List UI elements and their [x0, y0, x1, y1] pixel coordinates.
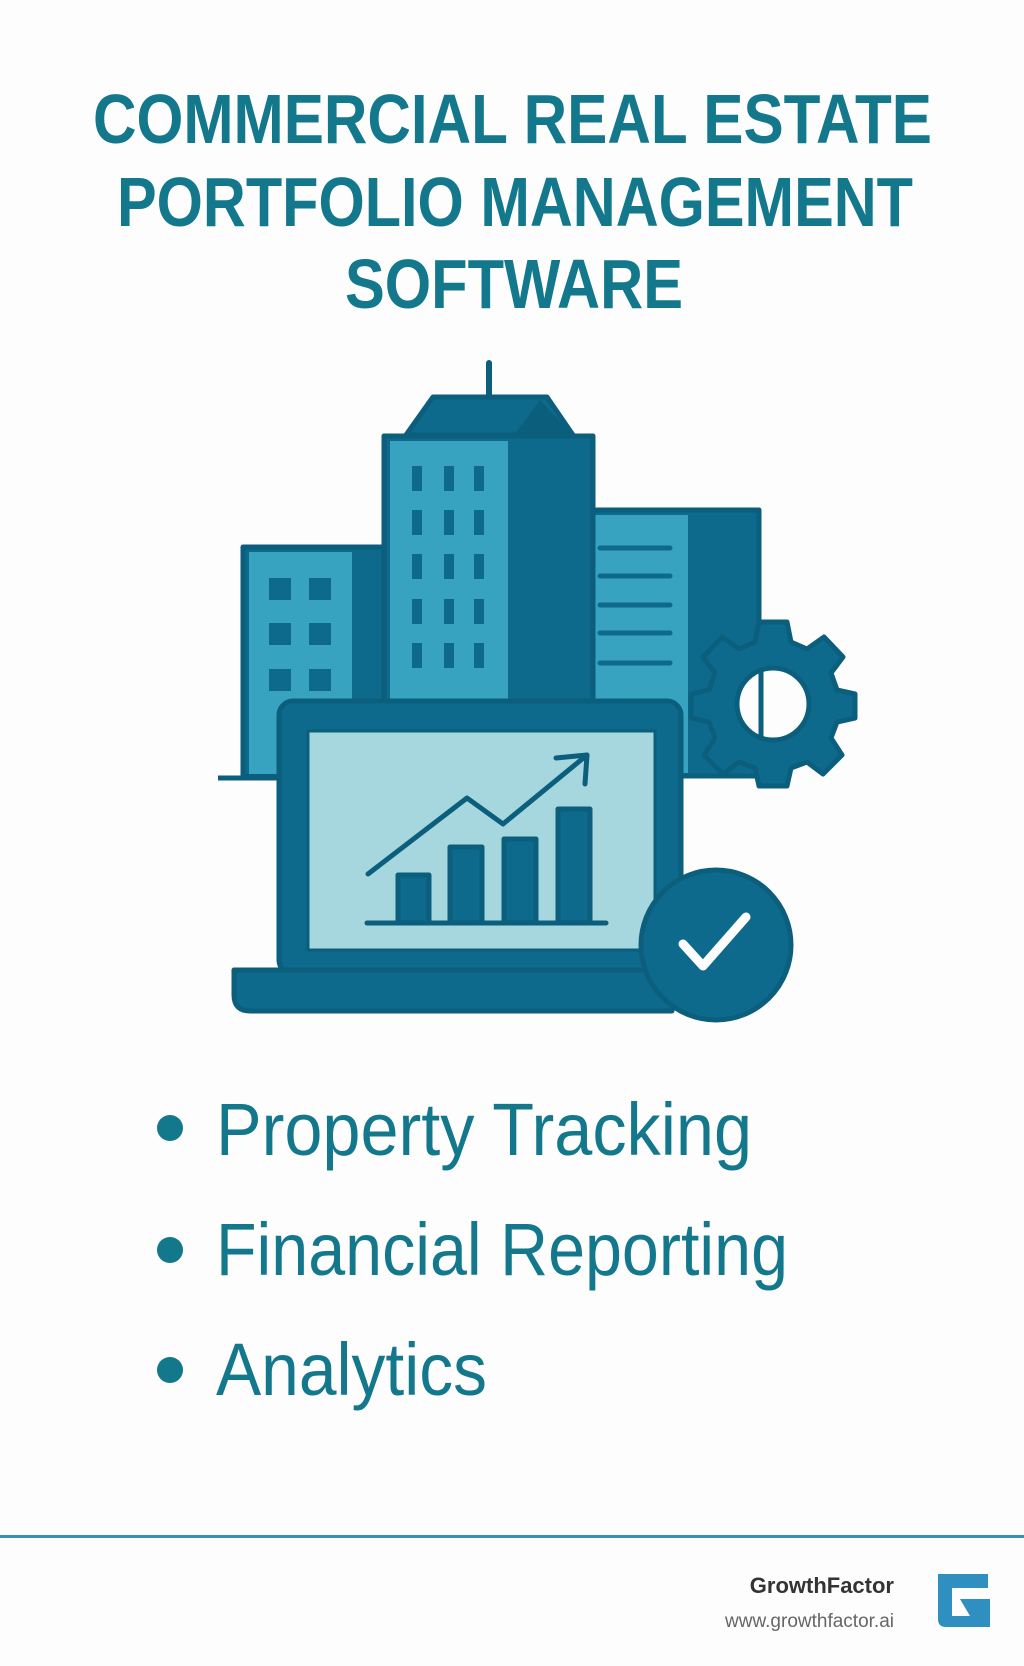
footer brand text — [724, 1573, 894, 1632]
icon: check badge — [641, 870, 791, 1020]
title: SOFTWARE — [345, 245, 683, 323]
bullet list — [157, 1088, 788, 1411]
bullet: financial reporting: Financial Reporting — [216, 1208, 788, 1291]
logo — [938, 1574, 990, 1627]
footer brand text: GrowthFactor — [750, 1573, 894, 1598]
bullet: property tracking: Property Tracking — [216, 1088, 752, 1171]
title — [93, 80, 932, 323]
illustration: buildings with laptop — [218, 363, 855, 1020]
icon: tall building — [384, 363, 593, 702]
bullet: analytics: Analytics — [216, 1328, 487, 1411]
icon: gear — [691, 622, 855, 786]
bar chart — [367, 755, 606, 923]
icon: left building — [218, 547, 384, 778]
icon: laptop — [234, 701, 681, 1011]
icon: right building — [574, 510, 759, 776]
footer brand text: www.growthfactor.ai — [724, 1611, 894, 1632]
